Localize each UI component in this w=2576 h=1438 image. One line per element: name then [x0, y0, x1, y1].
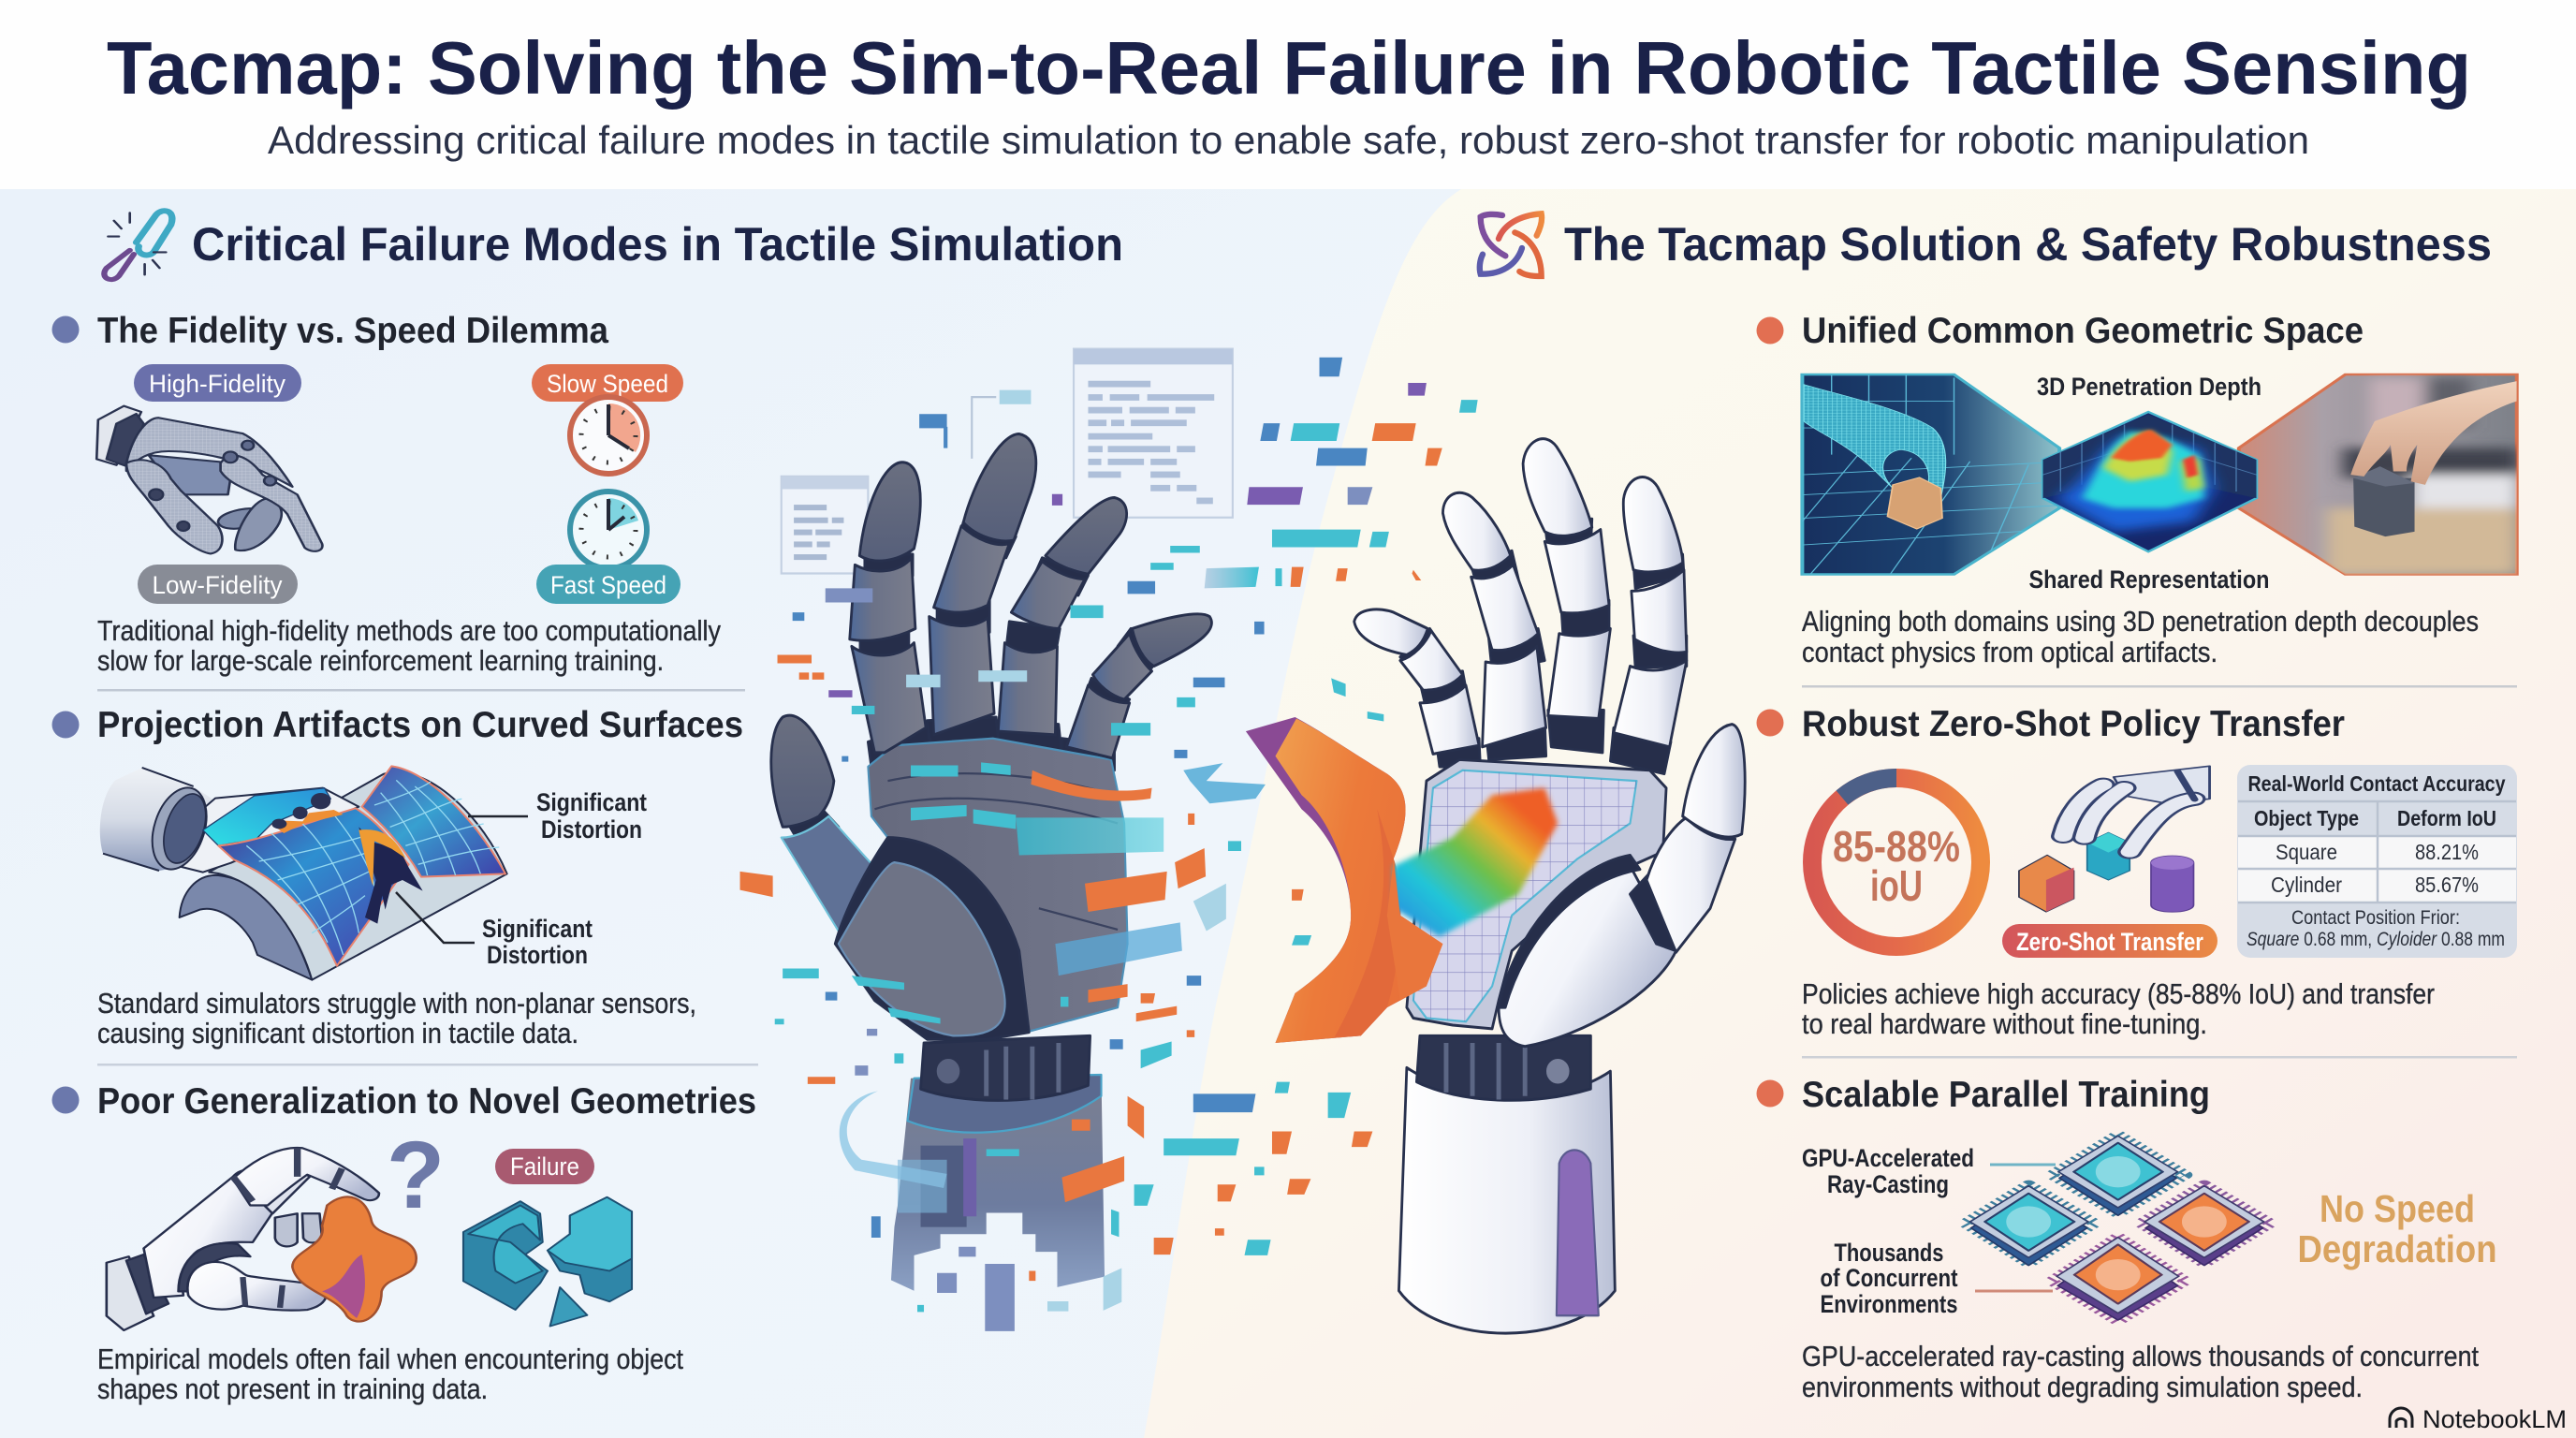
subtitle: Addressing critical failure modes in tactile simulation to enable safe, robust zero-shot transfer for robotic manipulation: [268, 118, 2309, 162]
panel: central hands illustration: [740, 349, 1745, 1333]
section: zero-shot transfer: [1756, 704, 2517, 1040]
icon: robot hand with objects: [2019, 766, 2210, 912]
joints: [786, 522, 1152, 848]
central penetration depth map: [2043, 412, 2257, 551]
description: Aligning both domains using 3D penetration depth decouples: [1802, 605, 2479, 638]
subheading: Robust Zero-Shot Policy Transfer: [1802, 704, 2345, 744]
description: [1802, 977, 2435, 1040]
description: causing significant distortion in tactile data.: [97, 1017, 578, 1049]
description: [97, 614, 721, 677]
description: Traditional high-fidelity methods are too computationally: [97, 614, 721, 647]
wrist: [1416, 1035, 1590, 1100]
section: poor generalization: [52, 1081, 756, 1405]
illustration: robot hand gripping unknown shape: [107, 1148, 417, 1330]
callout: upper distortion: [468, 788, 647, 844]
donut chart: 85-88% IoU: 85-88%: [1833, 822, 1960, 871]
simulated wireframe panel: [1802, 374, 2082, 575]
table: real-world contact accuracy: Deform IoU: [2397, 806, 2496, 830]
callout: no speed degradation: [2297, 1187, 2497, 1270]
thumb: [1630, 873, 1676, 951]
fingers: [859, 462, 920, 561]
section: parallel training: [1756, 1075, 2497, 1403]
bullet: [52, 712, 79, 738]
title: Tacmap: Solving the Sim-to-Real Failure in Robotic Tactile Sensing: [107, 26, 2471, 110]
forearm: [1398, 1067, 1615, 1333]
donut chart: 85-88% IoU: [1812, 778, 1981, 946]
description: shapes not present in training data.: [97, 1372, 488, 1405]
table: real-world contact accuracy: Contact Position Frior:: [2291, 907, 2460, 929]
icon: interwoven knot: [1480, 213, 1542, 276]
description: GPU-accelerated ray-casting allows thousands of concurrent: [1802, 1340, 2479, 1372]
icon: fast clock: [570, 492, 647, 568]
thenar: [1499, 866, 1676, 1047]
callout: upper distortion: Significant: [536, 788, 647, 816]
description: environments without degrading simulation speed.: [1802, 1371, 2363, 1403]
table: real-world contact accuracy: [2237, 765, 2517, 958]
description: [97, 987, 696, 1049]
pill: fast speed: Fast Speed: [550, 571, 666, 599]
callout: upper distortion: Distortion: [541, 815, 642, 844]
table: real-world contact accuracy: Square: [2276, 840, 2337, 864]
callout: lower distortion: Distortion: [487, 941, 588, 969]
table: real-world contact accuracy: Square 0.68 mm, Cyloider 0.88 mm: [2247, 929, 2505, 950]
section: projection artifacts: [52, 705, 743, 1049]
callout: GPU-accelerated ray-casting: Ray-Casting: [1827, 1170, 1949, 1198]
pill: low fidelity: Low-Fidelity: [152, 571, 283, 599]
pill: high fidelity: [134, 364, 301, 402]
bullet: [1756, 316, 1784, 345]
subheading: Projection Artifacts on Curved Surfaces: [97, 705, 743, 745]
pill: high fidelity: High-Fidelity: [149, 370, 285, 398]
callout: thousands of concurrent environments: Thousands: [1835, 1239, 1943, 1267]
icon: robotic hand low and high fidelity: [96, 406, 322, 553]
panel: Tacmap solution: [1480, 213, 2518, 1403]
orange deformable object: [1246, 717, 1442, 1043]
palm: [868, 739, 1128, 1033]
description: [1802, 605, 2479, 668]
label: 3D penetration depth: 3D Penetration Depth: [2037, 373, 2261, 401]
illustration: sim, depth, real hexagons: [1802, 374, 2518, 575]
forearm: [891, 1075, 1105, 1291]
pill: slow speed: Slow Speed: [547, 370, 668, 398]
icon: fractured teal block: [463, 1197, 632, 1327]
real photo panel: [2239, 374, 2518, 575]
pill: slow speed: [532, 364, 683, 402]
donut chart: 85-88% IoU: ioU: [1870, 861, 1923, 910]
table: real-world contact accuracy: 85.67%: [2415, 873, 2479, 897]
callout: thousands of concurrent environments: [1820, 1239, 2053, 1318]
panel: critical failure modes: [52, 211, 1123, 1405]
description: [97, 1343, 683, 1405]
pill: low fidelity: [138, 565, 298, 604]
pill: failure: [495, 1149, 594, 1184]
icon: slow clock: [570, 397, 647, 474]
callout: no speed degradation: No Speed: [2320, 1187, 2475, 1230]
subheading: Unified Common Geometric Space: [1802, 311, 2364, 351]
thumb: [782, 816, 873, 931]
code window: large: [1074, 349, 1233, 518]
fingers: [1442, 492, 1511, 570]
heading: The Tacmap Solution & Safety Robustness: [1564, 218, 2492, 271]
data fragments: teal, blue, orange, purple: [740, 358, 1478, 1331]
illustration: curved sensor with distorted mesh: [100, 766, 507, 980]
label: shared representation: Shared Representation: [2029, 565, 2269, 594]
real robot hand with tactile map: [1246, 439, 1745, 1333]
heading: Critical Failure Modes in Tactile Simulation: [192, 218, 1123, 271]
description: [1802, 1340, 2479, 1403]
tactile heat map: [1394, 788, 1558, 937]
subheading: Poor Generalization to Novel Geometries: [97, 1081, 756, 1122]
callout: no speed degradation: Degradation: [2297, 1227, 2497, 1270]
subheading: Scalable Parallel Training: [1802, 1075, 2210, 1115]
section: fidelity vs speed: [52, 311, 721, 677]
icon: four GPU chips: [1965, 1135, 2271, 1322]
bullet: [52, 316, 79, 343]
icon: question mark: ?: [387, 1122, 445, 1228]
watermark: NotebookLM: NotebookLM: [2422, 1405, 2567, 1433]
description: Standard simulators struggle with non-planar sensors,: [97, 987, 696, 1020]
table: real-world contact accuracy: Cylinder: [2271, 873, 2342, 897]
callout: lower distortion: [396, 892, 593, 969]
description: Empirical models often fail when encountering object: [97, 1343, 683, 1375]
code window: small: [782, 397, 996, 573]
table: real-world contact accuracy: Real-World Contact Accuracy: [2248, 771, 2506, 796]
bullet: [52, 1086, 79, 1114]
bullet: [1756, 1080, 1784, 1107]
dissolving simulated robot hand: [771, 433, 1211, 1291]
subheading: The Fidelity vs. Speed Dilemma: [97, 311, 608, 351]
callout: GPU-accelerated ray-casting: [1802, 1144, 2056, 1198]
pill: fast speed: [536, 565, 681, 604]
description: Policies achieve high accuracy (85-88% IoU) and transfer: [1802, 977, 2435, 1010]
section: unified geometric space: [1756, 311, 2518, 668]
callout: GPU-accelerated ray-casting: GPU-Accelerated: [1802, 1144, 1974, 1172]
callout: thousands of concurrent environments: of Concurrent: [1820, 1264, 1958, 1292]
bullet: [1756, 710, 1784, 736]
description: to real hardware without fine-tuning.: [1802, 1007, 2207, 1040]
pill: zero-shot transfer: Zero-Shot Transfer: [2016, 928, 2203, 956]
table: real-world contact accuracy: Object Type: [2254, 806, 2359, 830]
pill: failure: Failure: [510, 1152, 579, 1181]
callout: lower distortion: Significant: [482, 915, 593, 943]
table: real-world contact accuracy: 88.21%: [2415, 840, 2479, 864]
palm: [1407, 759, 1666, 1029]
callout: thousands of concurrent environments: Environments: [1820, 1290, 1958, 1318]
joints: [1400, 519, 1687, 774]
wrist: [921, 1035, 1090, 1100]
description: slow for large-scale reinforcement learning training.: [97, 644, 664, 677]
description: contact physics from optical artifacts.: [1802, 636, 2217, 668]
icon: broken chain link: [104, 211, 172, 280]
